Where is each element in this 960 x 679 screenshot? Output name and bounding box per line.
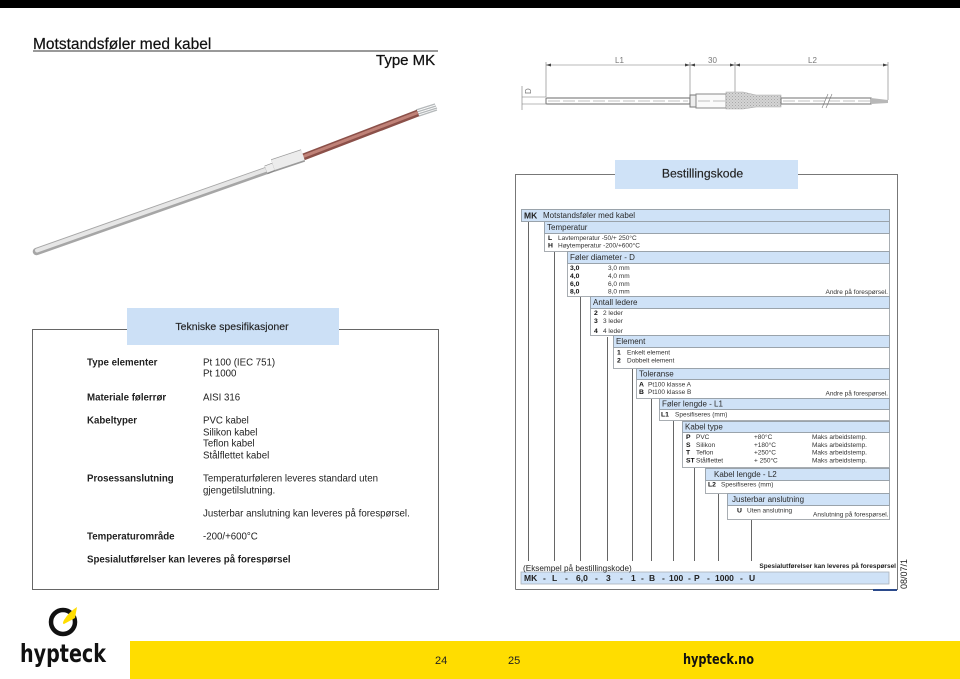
section: Kabel type: PVC (696, 434, 710, 441)
section: Kabel type: ST (686, 458, 696, 464)
section: Justerbar anslutning: Anslutning på forespørsel. (813, 510, 889, 518)
section: Føler diameter: 6,0 mm (608, 281, 630, 288)
logo (20, 607, 107, 668)
order example: - (662, 573, 665, 583)
section: Toleranse: Andre på forespørsel. (825, 390, 888, 398)
section: Kabel type: P (686, 434, 691, 441)
section: Element: 2 (617, 358, 621, 364)
sleeve (266, 155, 303, 170)
dimension lines (522, 62, 888, 110)
order example: Spesialutførelser kan leveres på forespørsel (759, 562, 896, 570)
title (33, 36, 438, 69)
arrowheads (546, 64, 888, 66)
order example (521, 562, 896, 584)
section: Føler lengde: L1 (661, 412, 669, 418)
spec: prosessanslutning: Temperaturføleren leveres standard uten (203, 474, 378, 484)
order example: 1000 (715, 573, 734, 583)
section: Justerbar anslutning (728, 494, 890, 520)
order example: P (694, 573, 700, 583)
order example: - (641, 573, 644, 583)
section: Føler diameter (568, 252, 890, 296)
order example: B (649, 573, 655, 583)
title: Motstandsføler med kabel (33, 36, 211, 53)
spec: kabeltyper (87, 416, 269, 462)
section: Føler lengde (660, 398, 890, 420)
section: Temperatur (544, 222, 890, 252)
order example: L (552, 573, 557, 583)
spec: kabeltyper: Kabeltyper (87, 416, 137, 426)
section: Kabel type: Stålflettet (696, 456, 723, 464)
page numbers: 24 (435, 655, 447, 667)
heading: tekniske spesifikasjoner: Tekniske spesifikasjoner (175, 321, 289, 333)
section: Element: Element (616, 337, 646, 346)
section: Kabel type: T (686, 450, 691, 456)
dimension labels: L2 (808, 56, 817, 65)
dimension labels: 30 (708, 56, 717, 65)
section: Toleranse: Pt100 klasse B (648, 389, 691, 396)
section: Temperatur: Temperatur (547, 223, 588, 232)
order example: - (707, 573, 710, 583)
section: Antall ledere: 2 (594, 310, 598, 317)
order example: 6,0 (576, 573, 588, 583)
section: Kabel type: Silikon (696, 442, 716, 449)
spec: prosessanslutning: Justerbar anslutning kan leveres på forespørsel. (203, 508, 410, 520)
spec: temperaturområde: Temperaturområde (87, 532, 175, 542)
date code: 08/07/1 (899, 559, 909, 589)
section: Føler diameter: 4,0 mm (608, 273, 630, 280)
heading: tekniske spesifikasjoner (127, 308, 339, 345)
order example: 100 (669, 573, 683, 583)
spec: kabeltyper: PVC kabel (203, 416, 249, 426)
spec: prosessanslutning: Prosessanslutning (87, 474, 174, 484)
section: Antall ledere: 2 leder (603, 310, 624, 317)
section: Kabel type: Maks arbeidstemp. (812, 442, 867, 449)
section: Føler lengde: Spesifiseres (mm) (675, 412, 727, 418)
section: Justerbar anslutning: Uten anslutning (747, 508, 793, 514)
section: Kabel lengde: L2 (708, 482, 716, 488)
section: Føler lengde: Føler lengde - L1 (662, 400, 723, 408)
section: Føler diameter: 6,0 (570, 281, 580, 288)
spec: prosessanslutning: gjengetilslutning. (203, 486, 275, 496)
dimension labels: L1 (615, 56, 624, 65)
order example: MK (524, 573, 538, 583)
section: Antall ledere: 4 (594, 328, 598, 335)
panel: bestillingskode frame (516, 160, 898, 590)
order example: - (740, 573, 743, 583)
section: Justerbar anslutning: U (737, 508, 742, 514)
spec: type elementer: Pt 100 (IEC 751) (203, 358, 275, 368)
dimension labels: D (524, 88, 533, 94)
spec: kabeltyper: Teflon kabel (203, 438, 255, 450)
section: Kabel lengde: Spesifiseres (mm) (721, 482, 773, 488)
section: Element (614, 336, 890, 368)
dimension labels (524, 56, 817, 94)
note: spesialutførelser: Spesialutførelser kan leveres på forespørsel (87, 554, 291, 566)
order example: U (749, 573, 755, 583)
order example: 3 (606, 573, 611, 583)
row: MK: Motstandsføler med kabel (543, 211, 635, 220)
section: Kabel type: Kabel type (685, 422, 723, 432)
section: Toleranse: B (639, 389, 644, 396)
section: Kabel lengde (706, 468, 890, 494)
section: Justerbar anslutning: Justerbar anslutning (732, 495, 804, 504)
section: Toleranse (636, 368, 890, 398)
tube (546, 94, 726, 108)
section: Kabel type: Teflon (696, 450, 714, 456)
section: Antall ledere: Antall ledere (593, 298, 638, 307)
top black bar (0, 0, 960, 8)
section: Antall ledere: 3 (594, 318, 598, 325)
spec: type elementer (87, 358, 275, 380)
spec: kabeltyper: Silikon kabel (203, 428, 257, 438)
panel: tekniske spesifikasjoner (32, 308, 438, 590)
section: Føler diameter: 3,0 mm (608, 265, 630, 272)
section: Kabel type: S (686, 442, 691, 449)
section: Kabel type: Maks arbeidstemp. (812, 434, 867, 441)
section: Føler diameter: 8,0 mm (608, 288, 630, 296)
dimension drawing (522, 56, 888, 110)
section: Temperatur: Lavtemperatur -50/+ 250°C (558, 234, 637, 242)
section: Kabel type: + 250°C (754, 456, 778, 464)
section: Føler diameter: 4,0 (570, 273, 580, 280)
section: Føler diameter: Andre på forespørsel. (825, 288, 888, 296)
section: Antall ledere: 4 leder (603, 328, 624, 335)
section: Føler diameter: Føler diameter - D (570, 253, 635, 262)
section: Kabel type: +80°C (754, 433, 773, 441)
cable (548, 94, 888, 108)
spec: kabeltyper: Stålflettet kabel (203, 450, 269, 462)
order example: - (595, 573, 598, 583)
spec: prosessanslutning (87, 474, 410, 520)
heading: Bestillingskode (615, 160, 798, 189)
section: Element: Dobbelt element (627, 358, 675, 364)
section: Antall ledere: 3 leder (603, 318, 624, 325)
spec: type elementer: Type elementer (87, 358, 158, 368)
footer url: hypteck.no (683, 652, 754, 668)
row: MK: MK (524, 210, 538, 220)
spec: materiale: Materiale følerrør (87, 392, 166, 404)
section: Temperatur: L (548, 235, 552, 242)
section: Kabel type (682, 422, 890, 468)
order example: - (620, 573, 623, 583)
section: Kabel lengde: Kabel lengde - L2 (714, 470, 777, 479)
logo wordmark: hypteck (20, 639, 107, 668)
section: Temperatur: H (548, 242, 553, 250)
connector lines (528, 222, 752, 561)
row: MK (522, 210, 890, 222)
spec: type elementer: Pt 1000 (203, 368, 237, 380)
section: Kabel type: Maks arbeidstemp. (812, 458, 867, 464)
footer bar (130, 641, 960, 679)
section: Føler diameter: 3,0 (570, 265, 580, 272)
icon: logo ring (51, 607, 77, 634)
blue accent line (873, 589, 897, 591)
spec: materiale: AISI 316 (203, 392, 240, 404)
order example: (Eksempel på bestillingskode) (523, 563, 632, 573)
order example: - (543, 573, 546, 583)
section: Toleranse: Pt100 klasse A (648, 382, 692, 388)
section: Element: Enkelt element (627, 350, 670, 356)
spec: temperaturområde: -200/+600°C (203, 532, 258, 542)
probe tube (36, 169, 268, 252)
section: Kabel type: +250°C (754, 448, 776, 456)
order example: - (688, 573, 691, 583)
section: Toleranse: Toleranse (639, 370, 674, 378)
heading: Bestillingskode: Bestillingskode (662, 166, 743, 180)
spec: materiale (87, 392, 240, 404)
section: Antall ledere (590, 296, 890, 336)
section: Element: 1 (617, 350, 621, 356)
section: Kabel type: +180°C (754, 441, 776, 449)
page numbers (435, 655, 520, 667)
wires (416, 104, 437, 116)
title: Type MK (376, 52, 435, 69)
section: Temperatur: Høytemperatur -200/+600°C (558, 242, 640, 250)
page numbers: 25 (508, 655, 520, 667)
section: Kabel type: Maks arbeidstemp. (812, 450, 867, 456)
section: Føler diameter: 8,0 (570, 288, 580, 296)
red cable (302, 112, 418, 158)
sensor illustration (36, 104, 437, 252)
braided sleeve (726, 92, 781, 109)
spec: temperaturområde (87, 532, 258, 542)
section: Toleranse: A (639, 382, 644, 388)
order example: 1 (631, 573, 636, 583)
order example: - (565, 573, 568, 583)
